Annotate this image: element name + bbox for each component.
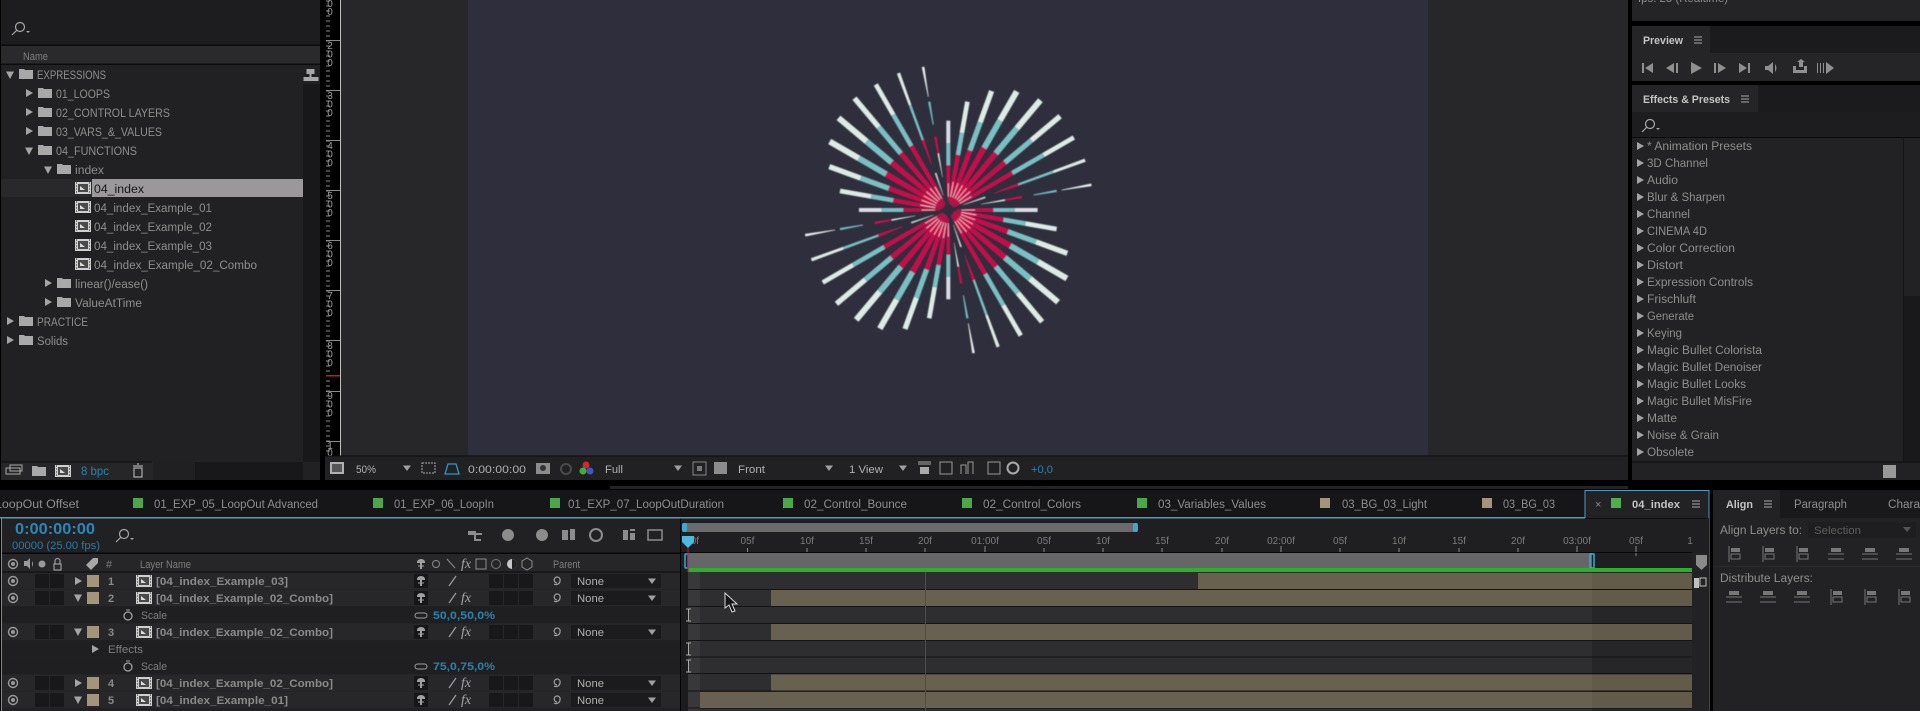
viewer toolbar: 1 View bbox=[849, 464, 883, 476]
layer row 2 bbox=[2, 590, 680, 606]
viewer toolbar: 0:00:00:00 bbox=[468, 464, 526, 476]
panel: align: Paragraph bbox=[1794, 499, 1847, 511]
project file tree bbox=[6, 69, 303, 348]
layer row 4: 4 bbox=[108, 678, 115, 690]
layer row 5: fx bbox=[461, 693, 472, 708]
tree row: 04_FUNCTIONS: 04_FUNCTIONS bbox=[56, 146, 137, 158]
dimmed bars past work area bbox=[1592, 573, 1692, 708]
effects list: Noise & Grain bbox=[1647, 430, 1719, 442]
layer column header: fx bbox=[461, 557, 472, 572]
vertical ruler: 0 bbox=[327, 58, 333, 69]
vertical ruler: 1 bbox=[327, 441, 333, 452]
viewer toolbar: Full bbox=[605, 464, 623, 476]
panel: effects and presets bbox=[1632, 85, 1920, 480]
right strip icons bbox=[1692, 553, 1709, 711]
tree row: 02_CONTROL LAYERS bbox=[26, 107, 170, 120]
effects property row bbox=[2, 640, 680, 657]
layer bars bbox=[700, 573, 1692, 708]
panel: composition viewer bbox=[325, 0, 1628, 480]
tree row: 01_LOOPS: 01_LOOPS bbox=[56, 89, 110, 101]
align target dropdown: Selection bbox=[1814, 525, 1861, 537]
timeline tab bar: × bbox=[1595, 499, 1601, 511]
tree row: ValueAtTime: ValueAtTime bbox=[75, 298, 142, 310]
tree row: 02_CONTROL LAYERS: 02_CONTROL LAYERS bbox=[56, 108, 170, 120]
time ruler: 15f bbox=[1155, 536, 1169, 547]
tree row: PRACTICE: PRACTICE bbox=[37, 317, 88, 329]
tree row: linear()/ease() bbox=[45, 278, 148, 291]
scale property row bbox=[2, 606, 680, 623]
vertical ruler: 0 bbox=[327, 50, 333, 60]
timeline tab bar bbox=[0, 490, 1709, 711]
track backgrounds bbox=[681, 572, 1692, 711]
effects list: Distort bbox=[1647, 260, 1684, 272]
vertical ruler: 5 bbox=[327, 191, 333, 202]
frame count: 00000 (25.00 fps) bbox=[12, 540, 100, 552]
navigator bar bbox=[682, 523, 1138, 532]
layer column header: Parent bbox=[553, 559, 580, 571]
panel: info bbox=[1632, 0, 1920, 21]
cursor bbox=[725, 593, 737, 612]
panel: align: Chara bbox=[1888, 499, 1920, 511]
time ruler: 05f bbox=[1333, 536, 1347, 547]
effects list: Keying bbox=[1647, 328, 1682, 340]
tree row: EXPRESSIONS bbox=[6, 69, 106, 82]
viewer toolbar: 50% bbox=[356, 464, 376, 476]
timeline tab bar: 01_EXP_06_LoopIn bbox=[394, 499, 494, 511]
time ruler: 00f bbox=[685, 536, 699, 547]
panel: effects and presets: Effects & Presets bbox=[1643, 94, 1730, 106]
timeline tab bar: 03_BG_03 bbox=[1503, 499, 1555, 511]
bit depth: 8 bpc bbox=[81, 464, 109, 478]
tree row: 04_index selected: 04_index bbox=[94, 184, 144, 196]
viewer toolbar bbox=[325, 456, 1628, 480]
effects list: * Animation Presets bbox=[1647, 141, 1752, 153]
panel: align bbox=[1713, 490, 1920, 711]
tree row: index bbox=[44, 164, 104, 177]
tree row: Solids bbox=[7, 335, 68, 348]
vertical ruler: 4 bbox=[327, 141, 333, 152]
project toolbar bbox=[0, 462, 320, 480]
panel: project bbox=[0, 0, 320, 480]
vertical ruler: 0 bbox=[327, 448, 333, 459]
layer row 3: None bbox=[577, 627, 604, 639]
timeline tab bar: 01_EXP_07_LoopOutDuration bbox=[568, 499, 724, 511]
preview transport controls bbox=[1642, 59, 1834, 74]
vertical ruler: 9 bbox=[327, 391, 333, 402]
time ruler: 1 bbox=[1687, 536, 1693, 547]
align icons bbox=[1729, 546, 1912, 562]
vertical ruler: 0 bbox=[327, 350, 333, 360]
layer row 1 bbox=[2, 572, 680, 589]
effects list: Magic Bullet MisFire bbox=[1647, 396, 1752, 408]
vertical ruler: 0 bbox=[327, 158, 333, 169]
layer row 3: [04_index_Example_02_Combo] bbox=[156, 627, 333, 639]
vertical ruler: 0 bbox=[327, 7, 333, 18]
time ruler: 15f bbox=[1452, 536, 1466, 547]
scale property row bbox=[2, 658, 680, 674]
vertical ruler: 3 bbox=[327, 91, 333, 102]
layer row 2: 2 bbox=[108, 593, 114, 605]
layer row 5: 5 bbox=[108, 695, 114, 707]
tree row: 04_index_Example_03: 04_index_Example_03 bbox=[94, 241, 212, 253]
time ruler: 01:00f bbox=[971, 536, 999, 547]
scale property row: Scale bbox=[141, 610, 167, 622]
effects list: Generate bbox=[1647, 311, 1694, 323]
timeline tab bar: 02_Control_Colors bbox=[983, 499, 1081, 511]
timeline tab bar: 04_index bbox=[1632, 499, 1681, 511]
panel: timeline layers bbox=[2, 518, 680, 711]
effects list: 3D Channel bbox=[1647, 158, 1708, 170]
scale property row: Scale bbox=[141, 661, 167, 673]
layer row 4: [04_index_Example_02_Combo] bbox=[156, 678, 333, 690]
viewer toolbar: Front bbox=[738, 464, 765, 476]
effects list: Blur & Sharpen bbox=[1647, 192, 1725, 204]
panel: preview bbox=[1632, 26, 1920, 81]
timeline tab bar: 01_EXP_05_LoopOut Advanced bbox=[154, 499, 318, 511]
layer row 3: 3 bbox=[108, 627, 114, 639]
panel: align: Align bbox=[1726, 499, 1753, 511]
layer row 5: None bbox=[577, 695, 604, 707]
distribute layers label: Distribute Layers: bbox=[1720, 573, 1813, 585]
work area bar bbox=[685, 553, 1594, 568]
effects list: Magic Bullet Looks bbox=[1647, 379, 1746, 391]
tree row: 03_VARS_&_VALUES: 03_VARS_&_VALUES bbox=[56, 127, 162, 139]
vertical ruler: 6 bbox=[327, 241, 333, 252]
panel: preview: Preview bbox=[1643, 35, 1683, 47]
layer row 1: None bbox=[577, 576, 604, 588]
layer row 1: 1 bbox=[108, 576, 114, 588]
vertical ruler: 0 bbox=[327, 300, 333, 310]
current time marker bbox=[925, 572, 926, 711]
tree row: 04_index_Example_01: 04_index_Example_01 bbox=[94, 203, 212, 215]
faint scrollbar bbox=[610, 486, 1628, 489]
effects list: Color Correction bbox=[1647, 243, 1735, 255]
layer row 3: fx bbox=[461, 625, 472, 640]
viewer toolbar: +0,0 bbox=[1031, 464, 1053, 476]
effects list bbox=[1637, 141, 1763, 459]
layer row 4: None bbox=[577, 678, 604, 690]
tree row: linear()/ease(): linear()/ease() bbox=[75, 279, 148, 291]
vertical ruler: 8 bbox=[327, 341, 333, 352]
layer row 4 bbox=[2, 674, 680, 691]
timeline tab bar: 03_BG_03_Light bbox=[1342, 499, 1428, 511]
effects list: Obsolete bbox=[1647, 447, 1694, 459]
keyframe beams bbox=[686, 609, 691, 672]
effects list: Magic Bullet Colorista bbox=[1647, 345, 1763, 357]
project column header: Name bbox=[23, 51, 48, 63]
effects property row: Effects bbox=[108, 644, 144, 656]
layer row 3 bbox=[2, 624, 680, 640]
time ruler: 15f bbox=[859, 536, 873, 547]
chart: radial burst animation bbox=[805, 67, 1092, 353]
tree row: 04_index_Example_02_Combo: 04_index_Example_02_Combo bbox=[94, 260, 257, 272]
time ruler: 20f bbox=[918, 536, 932, 547]
tree row: index: index bbox=[75, 165, 104, 177]
vertical ruler: 7 bbox=[327, 291, 333, 302]
time ruler bbox=[685, 536, 1693, 556]
effects list: Audio bbox=[1647, 175, 1678, 187]
layer row 4: fx bbox=[461, 676, 472, 691]
time ruler: 10f bbox=[800, 536, 814, 547]
effects list: Expression Controls bbox=[1647, 277, 1753, 289]
tree row: 04_FUNCTIONS bbox=[25, 145, 137, 158]
tree row: ValueAtTime bbox=[45, 297, 142, 310]
layer column header bbox=[8, 557, 580, 572]
layer row 5: [04_index_Example_01] bbox=[156, 695, 288, 707]
layer column header: # bbox=[106, 559, 113, 571]
vertical ruler: 0 bbox=[327, 108, 333, 119]
time ruler: 05f bbox=[741, 536, 755, 547]
tree row: 04_index selected bbox=[75, 179, 303, 197]
tree row: Solids: Solids bbox=[37, 336, 68, 348]
comp canvas bbox=[468, 0, 1428, 456]
vertical ruler: 0 bbox=[327, 308, 333, 319]
effects list: Matte bbox=[1647, 413, 1677, 425]
time ruler: 10f bbox=[1096, 536, 1110, 547]
timeline control icons bbox=[468, 529, 662, 541]
align target dropdown bbox=[1808, 522, 1916, 538]
icon: flowchart bbox=[304, 69, 318, 81]
effects list: Magic Bullet Denoiser bbox=[1647, 362, 1762, 374]
vertical ruler: 0 bbox=[327, 200, 333, 210]
icon: project search bbox=[12, 22, 30, 35]
vertical ruler: 0 bbox=[327, 400, 333, 410]
tree row: 04_index_Example_02: 04_index_Example_02 bbox=[94, 222, 212, 234]
effects list: Channel bbox=[1647, 209, 1690, 221]
layer row 2: None bbox=[577, 593, 604, 605]
time ruler: 02:00f bbox=[1267, 536, 1295, 547]
vertical ruler: 0 bbox=[327, 100, 333, 110]
time ruler: 05f bbox=[1037, 536, 1051, 547]
vertical ruler: 0 bbox=[327, 150, 333, 160]
time ruler: 05f bbox=[1629, 536, 1643, 547]
timeline tab bar: 03_Variables_Values bbox=[1158, 499, 1266, 511]
time ruler: 03:00f bbox=[1563, 536, 1591, 547]
effects list: Frischluft bbox=[1647, 294, 1697, 306]
playhead bbox=[682, 536, 694, 548]
panel: timeline ruler and tracks bbox=[681, 518, 1709, 711]
time ruler: 10f bbox=[1392, 536, 1406, 547]
layer column header: Layer Name bbox=[140, 559, 191, 571]
time ruler: 20f bbox=[1511, 536, 1525, 547]
tree row: 03_VARS_&_VALUES bbox=[26, 126, 162, 139]
vertical ruler: 0 bbox=[327, 208, 333, 219]
layer row 2: fx bbox=[461, 591, 472, 606]
layer row 1: [04_index_Example_03] bbox=[156, 576, 288, 588]
distribute icons bbox=[1726, 589, 1910, 605]
tree row: EXPRESSIONS: EXPRESSIONS bbox=[37, 70, 106, 82]
layer row 2: [04_index_Example_02_Combo] bbox=[156, 593, 333, 605]
vertical ruler: 0 bbox=[327, 250, 333, 260]
tree row: 01_LOOPS bbox=[26, 88, 110, 101]
vertical ruler: 0 bbox=[327, 258, 333, 269]
time ruler: 20f bbox=[1215, 536, 1229, 547]
vertical ruler bbox=[325, 0, 341, 459]
vertical ruler: 0 bbox=[327, 408, 333, 419]
scale property row: 75,0,75,0% bbox=[433, 661, 495, 673]
vertical ruler: 0 bbox=[327, 358, 333, 369]
layer row 5 bbox=[2, 692, 680, 708]
timecode: 0:00:00:00 bbox=[15, 521, 95, 538]
effects list: CINEMA 4D bbox=[1647, 226, 1707, 238]
green render bar bbox=[688, 568, 1692, 572]
vertical ruler: 2 bbox=[327, 41, 333, 52]
tree row: PRACTICE bbox=[7, 316, 88, 329]
align layers label: Align Layers to: bbox=[1720, 525, 1802, 537]
timeline tab bar: 02_Control_Bounce bbox=[804, 499, 907, 511]
scale property row: 50,0,50,0% bbox=[433, 610, 495, 622]
